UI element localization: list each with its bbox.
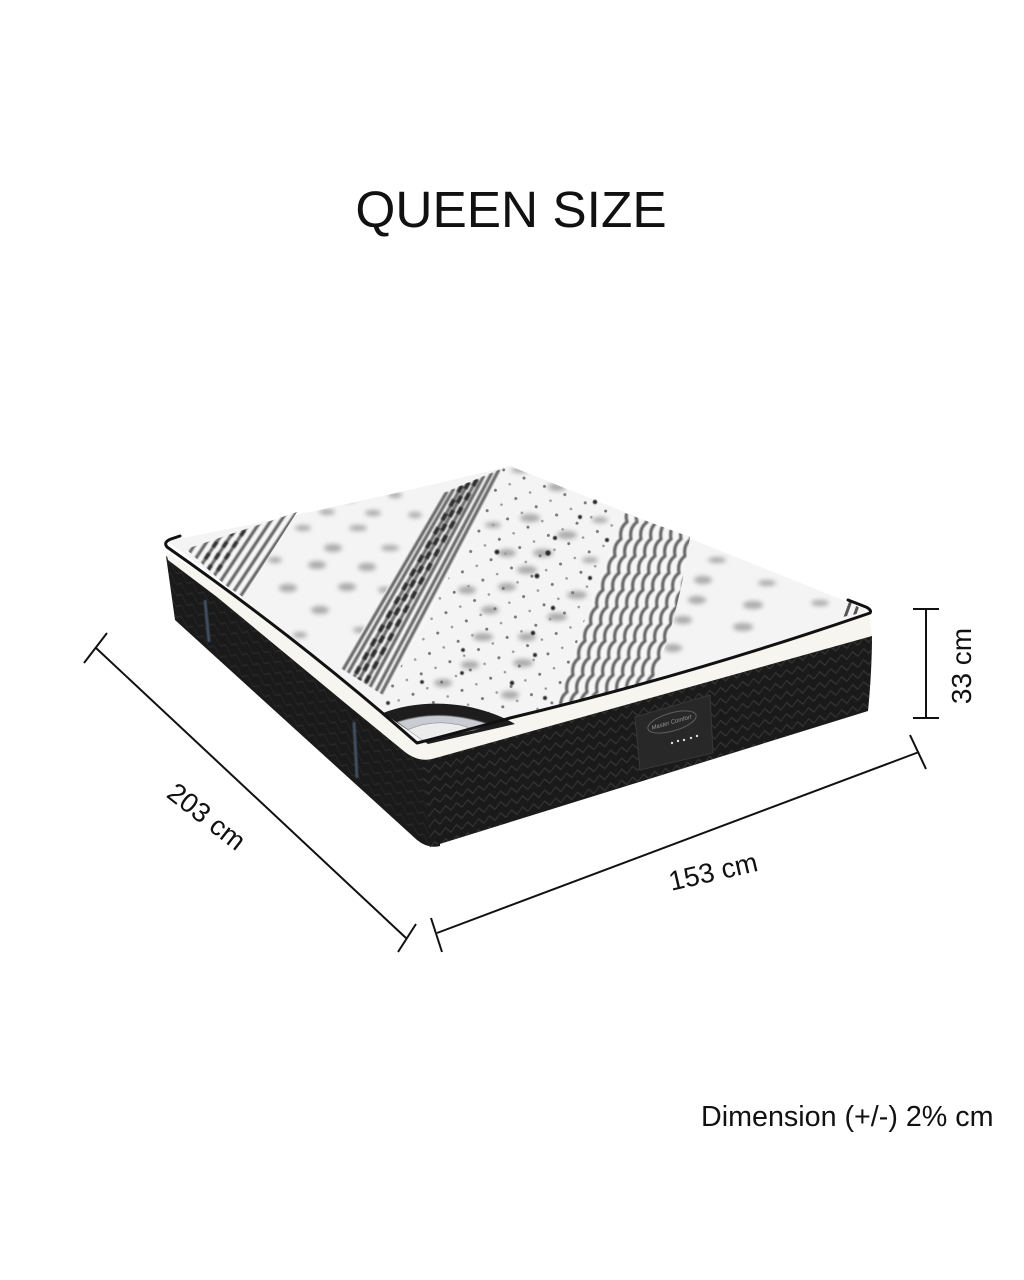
dimension line: height 33 cm [913, 609, 939, 718]
mattress left side panel [166, 556, 440, 847]
corner badge [383, 704, 515, 744]
striped band 1 [188, 512, 297, 597]
quilting tufts [268, 467, 829, 699]
dimension line: length 203 cm [84, 633, 416, 952]
striped corner band 4 [844, 602, 859, 617]
length label: 203 cm [162, 776, 252, 856]
perforated dots [385, 468, 614, 714]
dimension line: width 153 cm [431, 735, 926, 952]
mattress illustration [108, 460, 872, 847]
side stitch marks [205, 600, 357, 778]
brand label on front panel: Master Comfort [651, 714, 693, 732]
top edge piping [166, 536, 870, 743]
width label: 153 cm [666, 846, 761, 897]
quilted top surface [167, 466, 870, 743]
brand label on front panel [635, 695, 713, 770]
striped band 2 [341, 468, 503, 695]
title: QUEEN SIZE [355, 180, 667, 238]
mattress front side panel [420, 635, 872, 847]
height label: 33 cm [946, 628, 977, 704]
striped band 3 [558, 513, 690, 708]
tolerance note: Dimension (+/-) 2% cm [701, 1101, 994, 1133]
foam pillow-top band [166, 552, 872, 760]
